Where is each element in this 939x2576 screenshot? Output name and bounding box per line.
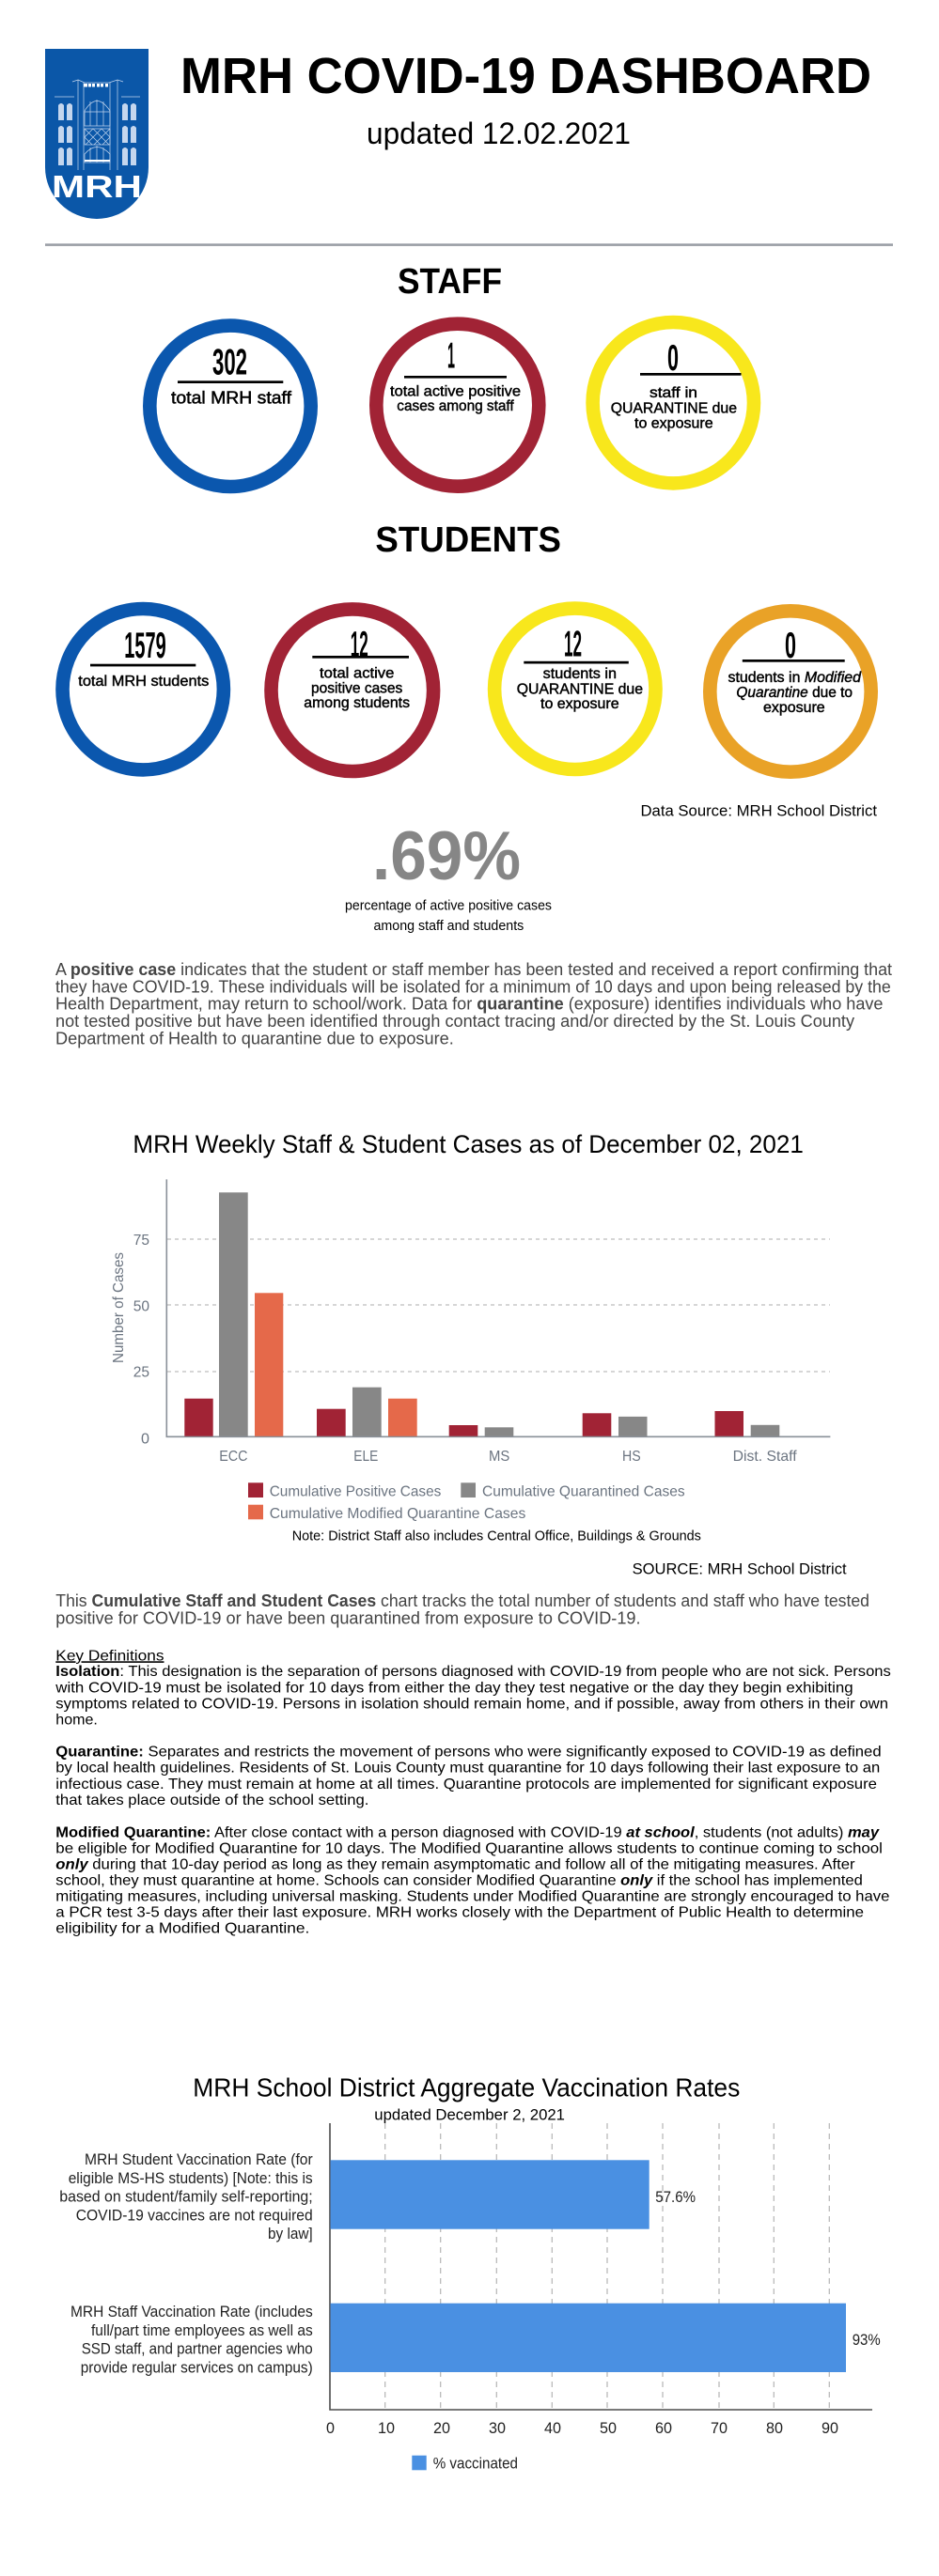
bars: ECC <box>184 1192 283 1436</box>
stat caption: among staff and students <box>374 919 524 934</box>
chart source: SOURCE: MRH School District <box>633 1560 847 1578</box>
panel: student quarantine <box>494 609 656 769</box>
x axis labels <box>219 1449 797 1465</box>
x axis ticks: 50 <box>600 2420 617 2437</box>
panel: staff total: 302 <box>212 343 247 383</box>
text block: positive case and quarantine explanation: A positive case indicates that the student or staff member has been tested and received a report confirming that <box>55 960 892 979</box>
y labels: staff rate: SSD staff, and partner agencies who <box>82 2341 313 2358</box>
panel: student total: 1579 <box>124 626 166 666</box>
y labels: staff rate: provide regular services on campus) <box>81 2359 313 2376</box>
y labels: student rate: by law] <box>268 2226 313 2242</box>
text block: modified quarantine definition <box>55 1824 890 1937</box>
x axis ticks: 70 <box>711 2420 728 2437</box>
panel: staff quarantine: QUARANTINE due <box>611 400 737 417</box>
panel: student modified quarantine <box>710 611 871 772</box>
text block: isolation definition <box>55 1664 891 1728</box>
text block: modified quarantine definition: Modified Quarantine: After close contact with a person diagnosed with COVID-19 at school, students (not adults) may <box>55 1824 880 1840</box>
panel: staff active positive: cases among staff <box>397 398 514 414</box>
text block: modified quarantine definition: a PCR test 3-5 days after their last exposure. MRH works closely with the Department of Public Health to determine <box>55 1905 864 1921</box>
text block: quarantine definition <box>55 1745 882 1808</box>
icon: MRH shield logo <box>45 49 149 219</box>
y labels: student rate: eligible MS-HS students) [Note: this is <box>69 2170 313 2187</box>
panel: staff quarantine: staff in <box>649 385 697 401</box>
bar: student vaccination <box>331 2160 649 2229</box>
text block: quarantine definition: by local health guidelines. Residents of St. Louis County must quarantine for 10 days following their last exposure to an <box>55 1761 880 1777</box>
panel: student active positive: 12 <box>351 625 368 665</box>
y labels: student rate: COVID-19 vaccines are not required <box>76 2207 313 2224</box>
panel: student active positive: positive cases <box>311 680 402 696</box>
text block: positive case and quarantine explanation: Health Department, may return to school/work. Data for quarantine (exposure) identifies individuals who have <box>55 995 884 1014</box>
text block: isolation definition: symptoms related to COVID-19. Persons in isolation should remain home, and if possible, away from others in their own <box>55 1696 888 1712</box>
panel: student quarantine: QUARANTINE due <box>517 681 643 697</box>
x axis ticks: 30 <box>489 2420 506 2437</box>
x axis labels: Dist. Staff <box>733 1449 797 1465</box>
y labels: staff rate: full/part time employees as well as <box>91 2322 313 2339</box>
legend: vaccination: % vaccinated <box>433 2456 518 2473</box>
panel: staff active positive: total active positive <box>390 384 521 400</box>
y axis labels: 50 <box>133 1299 149 1315</box>
panel: staff total <box>149 326 311 487</box>
x axis ticks <box>326 2420 838 2437</box>
bars: district staff <box>714 1411 779 1436</box>
legend: weekly cases: Cumulative Positive Cases <box>270 1484 441 1500</box>
text block: modified quarantine definition: mitigating measures, including universal masking. Students under Modified Quarantine are strongly encouraged to have <box>55 1889 890 1905</box>
panel: student modified quarantine: exposure <box>763 700 825 716</box>
y axis labels <box>133 1233 149 1448</box>
panel: staff active positive <box>376 324 539 487</box>
x axis ticks: 80 <box>766 2420 783 2437</box>
text block: isolation definition: Isolation: This designation is the separation of persons diagnosed with COVID-19 from people who are not sick. Persons <box>55 1664 891 1680</box>
data source note: Data Source: MRH School District <box>641 801 877 819</box>
text block: modified quarantine definition: eligibility for a Modified Quarantine. <box>55 1921 309 1937</box>
panel: student quarantine: students in <box>543 666 617 682</box>
bar chart: vaccination rates <box>59 2123 881 2437</box>
chart title: weekly cases: MRH Weekly Staff & Student Cases as of December 02, 2021 <box>133 1130 804 1158</box>
stat caption <box>345 899 552 934</box>
text block: cumulative chart description: positive for COVID-19 or have been quarantined from exposure to COVID-19. <box>55 1609 641 1628</box>
text block: isolation definition: home. <box>55 1712 98 1728</box>
heading: students: STUDENTS <box>375 520 561 560</box>
text block: positive case and quarantine explanation: Department of Health to quarantine due to exposure. <box>55 1029 454 1047</box>
panel: student active positive <box>271 609 433 771</box>
text block: positive case and quarantine explanation: they have COVID-19. These individuals will be isolated for a minimum of 10 days and upon being released by the <box>55 977 891 996</box>
text block: isolation definition: with COVID-19 must be isolated for 10 days from either the day they test negative or the day they begin exhibiting <box>55 1680 853 1696</box>
panel: student total: total MRH students <box>78 674 209 690</box>
legend: weekly cases: Cumulative Modified Quarantine Cases <box>270 1506 525 1522</box>
x axis ticks: 20 <box>433 2420 450 2437</box>
bars: MS <box>449 1425 513 1436</box>
y labels: staff rate: MRH Staff Vaccination Rate (includes <box>70 2304 313 2320</box>
chart subtitle: vaccination update: updated December 2, 2021 <box>374 2106 565 2123</box>
panel: student quarantine: 12 <box>564 624 582 665</box>
x axis ticks: 60 <box>655 2420 672 2437</box>
value label: 93%: 93% <box>853 2332 881 2349</box>
heading: staff: STAFF <box>398 262 502 302</box>
panel: student active positive: among students <box>304 695 410 711</box>
text block: cumulative chart description: This Cumulative Staff and Student Cases chart tracks the total number of students and staff who have tested <box>55 1591 869 1610</box>
text block: positive case and quarantine explanation <box>55 960 892 1047</box>
y axis labels: 0 <box>141 1432 149 1448</box>
subtitle: update date: updated 12.02.2021 <box>367 116 631 150</box>
panel: staff quarantine: 0 <box>667 338 679 379</box>
y labels: student rate <box>59 2151 313 2242</box>
panel: student modified quarantine: 0 <box>785 626 796 666</box>
x axis labels: ECC <box>219 1449 248 1465</box>
chart note: Note: District Staff also includes Central Office, Buildings & Grounds <box>292 1529 701 1544</box>
bars: ELE <box>317 1388 417 1436</box>
y labels: staff rate <box>70 2304 313 2376</box>
x axis ticks: 90 <box>822 2420 838 2437</box>
y axis labels: 75 <box>133 1233 149 1249</box>
text block: modified quarantine definition: be eligible for Modified Quarantine for 10 days. The Modified Quarantine allows students to continue coming to school <box>55 1840 883 1856</box>
x axis ticks: 10 <box>378 2420 395 2437</box>
panel: student quarantine: to exposure <box>540 696 619 712</box>
text block: modified quarantine definition: school, they must quarantine at home. Schools can consider Modified Quarantine only if the school has implemented <box>55 1873 863 1889</box>
icon: MRH shield logo: MRH <box>52 169 142 204</box>
text block: quarantine definition: that takes place outside of the school setting. <box>55 1792 368 1808</box>
big stat: percentage: .69% <box>372 818 521 894</box>
stat caption: percentage of active positive cases <box>345 899 552 914</box>
panel: student total <box>62 609 224 769</box>
text block: key definitions heading: Key Definitions <box>55 1648 164 1664</box>
panel: student modified quarantine: students in Modified <box>728 670 862 686</box>
y axis title: Number of Cases <box>111 1252 127 1363</box>
text block: modified quarantine definition: only during that 10-day period as long as they remain asymptomatic and follow all of the mitigating measures. After <box>55 1857 855 1873</box>
bars: HS <box>583 1413 647 1436</box>
text block: quarantine definition: infectious case. They must remain at home at all times. Quarantine protocols are implemented for significant exposure <box>55 1777 877 1792</box>
panel: staff active positive: 1 <box>447 336 455 377</box>
panel: student active positive: total active <box>320 666 394 682</box>
x axis ticks: 40 <box>544 2420 561 2437</box>
text block: quarantine definition: Quarantine: Separates and restricts the movement of persons who were significantly exposed to COVID-19 as defined <box>55 1745 882 1761</box>
value label: 57.6%: 57.6% <box>655 2189 696 2206</box>
title: MRH COVID-19 DASHBOARD <box>180 48 871 104</box>
x axis labels: HS <box>622 1449 641 1465</box>
y labels: student rate: MRH Student Vaccination Rate (for <box>85 2151 313 2168</box>
panel: staff total: total MRH staff <box>171 389 292 408</box>
text block: positive case and quarantine explanation: not tested positive but have been identified through contact tracing and/or directed by the St. Louis County <box>55 1012 854 1031</box>
panel: staff quarantine: to exposure <box>634 415 713 432</box>
y labels: student rate: based on student/family self-reporting; <box>59 2189 313 2206</box>
text block: cumulative chart description <box>55 1591 869 1628</box>
y axis labels: 25 <box>133 1365 149 1381</box>
chart title: vaccination rates: MRH School District Aggregate Vaccination Rates <box>193 2073 740 2103</box>
x axis ticks: 0 <box>326 2420 335 2437</box>
bar: staff vaccination <box>331 2304 846 2372</box>
bar chart: weekly cases <box>111 1179 830 1465</box>
legend: weekly cases <box>248 1482 685 1522</box>
legend: weekly cases: Cumulative Quarantined Cases <box>482 1484 685 1500</box>
x axis labels: MS <box>489 1449 509 1465</box>
x axis labels: ELE <box>353 1449 378 1465</box>
panel: student modified quarantine: Quarantine due to <box>736 685 853 701</box>
panel: staff quarantine <box>593 322 754 483</box>
